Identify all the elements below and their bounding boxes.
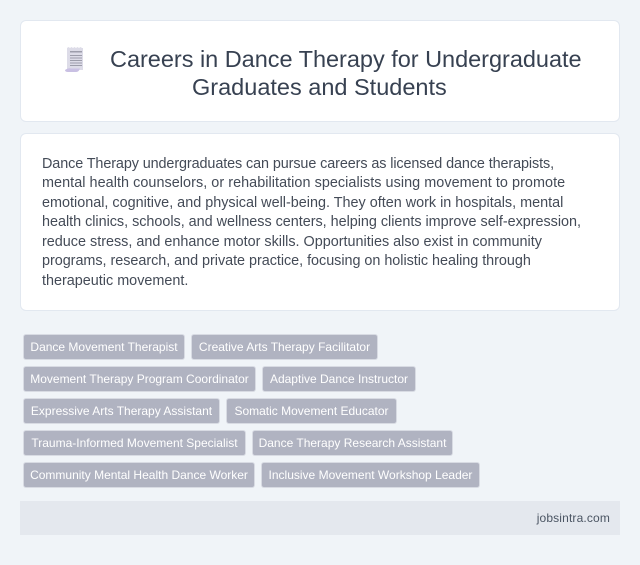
footer source text: jobsintra.com <box>537 511 610 525</box>
tag <box>227 399 396 423</box>
tag: Dance Therapy Research Assistant <box>259 436 446 450</box>
tag <box>24 463 254 487</box>
description text: programs, research, and private practice, focusing on holistic healing through <box>42 253 531 269</box>
description text: therapeutic movement. <box>42 273 188 289</box>
career tags <box>23 334 480 488</box>
tag: Creative Arts Therapy Facilitator <box>199 340 370 354</box>
title: Careers in Dance Therapy for Undergraduate <box>110 46 582 72</box>
tag: Dance Movement Therapist <box>30 340 178 354</box>
header panel <box>20 20 620 122</box>
description text: reduce stress, and enhance motor skills. Opportunities also exist in community <box>42 234 542 250</box>
description text: emotional, cognitive, and physical well-being. They often work in hospitals, mental <box>42 195 563 211</box>
icon: document receipt <box>65 47 83 72</box>
tag <box>263 367 415 391</box>
tag: Somatic Movement Educator <box>234 404 389 418</box>
description text <box>42 156 581 289</box>
title <box>110 46 582 100</box>
description text: Dance Therapy undergraduates can pursue careers as licensed dance therapists, <box>42 156 554 172</box>
tag <box>192 335 377 359</box>
tag: Movement Therapy Program Coordinator <box>30 372 249 386</box>
tag: Community Mental Health Dance Worker <box>30 468 248 482</box>
tag <box>24 399 219 423</box>
tag <box>24 367 255 391</box>
tag: Adaptive Dance Instructor <box>270 372 408 386</box>
description text: mental health counselors, or rehabilitation specialists using movement to promote <box>42 175 565 191</box>
tag <box>24 431 245 455</box>
description panel <box>20 133 620 311</box>
tag: Trauma-Informed Movement Specialist <box>31 436 238 450</box>
footer bar <box>20 501 620 535</box>
tag: Expressive Arts Therapy Assistant <box>31 404 212 418</box>
title: Graduates and Students <box>192 74 447 100</box>
tag <box>24 335 184 359</box>
tag <box>262 463 479 487</box>
description text: health clinics, schools, and wellness centers, helping clients improve self-expression, <box>42 214 581 230</box>
tag: Inclusive Movement Workshop Leader <box>269 468 472 482</box>
tag <box>253 431 452 455</box>
